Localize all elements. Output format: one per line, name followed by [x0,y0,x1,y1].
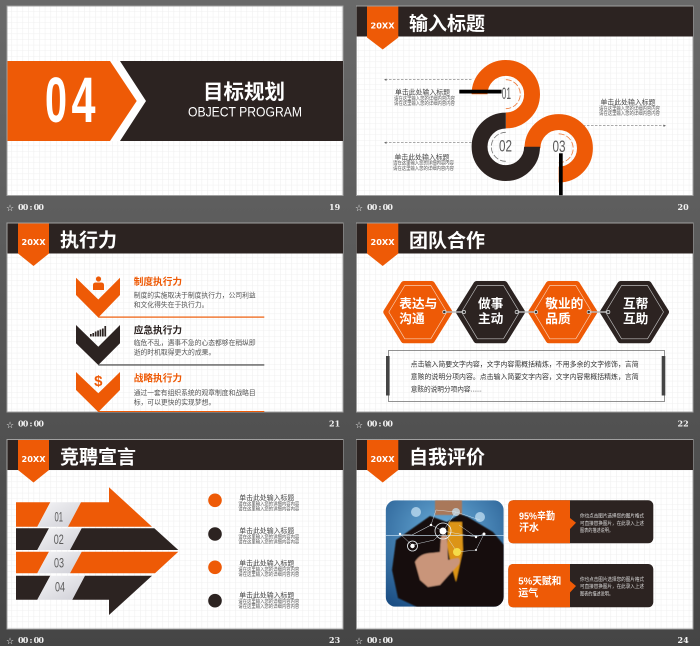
slide 20 year tag: 20XX [370,22,395,30]
hexagon 1 [386,284,449,340]
list text 4: 请在这里输入您的详细内容内容 [238,603,299,610]
slide 21 footer: 21 [329,418,340,428]
list text 4: 请在这里输入您的详细内容内容 [238,598,299,605]
slide 23 footer [6,635,341,646]
item 2 heading: 应急执行力 [134,323,182,336]
slide 22 footer: 22 [678,418,689,428]
slide 20 footer: 20 [678,202,689,212]
card heading: 汗水 [519,521,539,534]
hexagon 1: 表达与 [399,296,437,311]
hexagon 2 [459,284,522,340]
box paragraph: 意赅的说明分项内容...... [411,384,482,394]
hexagon 3 [531,284,594,340]
card heading [518,574,561,600]
list text 3: 请在这里输入您的详细内容内容 [238,571,299,578]
ring 02 dark [480,121,532,173]
hexagon 3: 品质 [545,311,571,326]
item 3 body: 标，可以更快的实现梦想。 [134,398,215,407]
card tab orange [508,564,576,607]
slide 19 footer: 00 : 00 [18,202,44,212]
slide 21 background [7,223,343,412]
slide 22 year tag: 20XX [370,238,395,247]
section number: 0 [45,64,67,136]
card description [580,512,644,534]
slide 20 header bar [356,6,693,36]
card description: 可直接替换图片，在此录入上述 [580,583,644,590]
card description: 图表的描述说明。 [580,590,613,598]
divider orange 1 [98,316,264,318]
callout text right [599,98,660,117]
slide 22 footer [355,418,689,431]
ring 03 orange [532,122,585,175]
hexagon 4: 互助 [623,312,648,326]
card heading: 运气 [518,586,538,600]
panel: slide 23 declaration [6,440,343,646]
ring numbers [499,85,566,156]
slide 23 footer: 23 [329,635,341,645]
slide 20 footer: ☆ [355,204,363,214]
panel: slide 19 section cover [6,6,343,214]
callout text right: 请在这里输入您的详细内容内容 [599,105,660,112]
orange section arrow [8,61,137,141]
card description: 图表的描述说明。 [580,527,613,534]
list text 1 [238,493,299,512]
slide 20 heading: 输入标题 [409,12,485,35]
list text 4 [238,590,299,610]
list text 2: 请在这里输入您的详细内容内容 [238,538,299,546]
slide 24 footer: 24 [678,635,689,645]
card body dark [508,500,653,543]
slide 21 header bar [8,224,343,254]
item 3 body: 通过一套有组织系统的观章制度和战略目 [134,388,256,397]
slide 19 footer: ☆ [6,204,14,214]
slide 24 header bar [356,440,693,470]
list text 1: 请在这里输入您的详细内容内容 [238,506,299,512]
slide 24 heading: 自我评价 [409,446,485,468]
icon: person [93,276,104,290]
list text 3: 单击此处输入标题 [239,558,294,568]
card description [580,576,644,598]
icon: bar chart [90,326,106,336]
arrow band 3 [16,552,178,573]
slide 19 footer [6,202,341,214]
list text 2 [238,526,299,546]
box paragraph: 意赅的说明分项内容。点击输入简要文字内容，文字内容需概括精炼，言简 [411,372,639,381]
slide 23 footer: 00 : 00 [18,635,44,645]
card heading: 95%辛勤 [519,509,555,522]
panel: slide 22 teamwork [355,223,693,431]
callout text lower left: 请在这里输入您的详细内容内容 [393,160,454,166]
slide 24 footer [355,635,689,646]
card description: 可直接替换图片，在此录入上述 [580,520,644,527]
card heading [519,509,555,534]
card 5 percent [508,564,653,607]
slide 21 heading: 执行力 [60,230,117,252]
text box [386,350,665,402]
ring numbers: 03 [552,138,566,156]
dark title banner [120,61,343,141]
list text 2: 单击此处输入标题 [239,526,294,535]
callout text upper left: 请在这里输入您的详细内容内容 [394,100,455,107]
hexagon 2: 主动 [478,311,504,326]
arrow band 4 [16,576,152,615]
arrow band 1: 01 [54,508,63,524]
slide 21 footer: ☆ [6,421,14,431]
arrow band 3: 03 [54,554,64,570]
arrow band 2 [16,528,178,550]
slide 24 year tag: 20XX [370,455,395,464]
chevron orange 3 [76,372,120,412]
slide 19 footer: 19 [329,202,341,212]
callout text lower left [393,152,454,172]
divider orange 3 [98,411,264,412]
slide 20 footer: 00 : 00 [367,202,393,212]
bullet dots [208,494,222,608]
hexagon 4 [603,284,666,340]
list text 4: 单击此处输入标题 [239,590,294,600]
box paragraph [411,360,639,394]
arrow band 4: 04 [55,578,65,594]
chevron orange 1 [76,278,120,318]
hexagon 4: 互帮 [623,296,649,311]
slide 22 footer: ☆ [355,421,363,431]
card heading: 5%天赋和 [518,574,561,588]
slide 24 background [356,440,693,629]
divider dark 2 [98,364,264,366]
panel: slide 24 self assessment [355,440,693,646]
item 3 body [134,388,256,407]
item 3 heading: 战略执行力 [134,372,182,385]
item 1 [76,275,264,412]
slide 21 footer: 00 : 00 [18,418,44,428]
slide 22 footer: 00 : 00 [367,418,393,428]
white chevron band [103,61,146,141]
slide 22 background [356,223,693,412]
callout text right: 请在这里输入您的详细内容内容 [599,110,660,117]
black bars [459,90,563,195]
inner dashed circles [491,80,573,163]
dashed leader lines [385,80,664,143]
slide 21 footer [6,418,340,431]
item 1 heading: 制度执行力 [134,275,182,288]
photo: businessman touching network [386,500,504,607]
icon: dollar: $ [94,373,103,390]
list text 1: 请在这里输入您的详细内容内容 [238,500,299,508]
slide 22 year tag [367,224,398,266]
slide 23 header bar [8,440,343,470]
callout text lower left: 单击此处输入标题 [394,152,450,162]
ring 01 orange [480,68,532,120]
slide 23 year tag [18,440,49,482]
callout text upper left [394,88,455,107]
box paragraph: 点击输入简要文字内容，文字内容需概括精炼，不用多余的文字修饰，言简 [411,360,639,368]
ring numbers: 01 [502,85,511,103]
slide 22 header bar [356,224,693,254]
item 2 body [134,339,256,356]
list text 1: 单击此处输入标题 [239,493,294,502]
slide 20 background [356,6,693,196]
card body dark [508,564,653,607]
list text 3: 请在这里输入您的详细内容内容 [238,566,299,573]
card 95 percent [508,500,653,543]
card tab orange [508,500,576,543]
slide 23 year tag: 20XX [22,455,46,464]
slide 22 heading: 团队合作 [409,230,485,252]
hexagon 2: 做事 [478,296,504,311]
box side bars [386,356,665,396]
box outline [388,350,664,402]
item 2 body: 临危不乱，遇事不急的心态都够在稍纵即 [134,338,256,347]
callout text lower left: 请在这里输入您的详细内容内容 [393,165,454,172]
ring numbers: 02 [499,138,512,156]
hexagon 1: 沟通 [399,311,425,326]
arrow band 2: 02 [54,531,64,547]
item 1 body: 和文化得失在于执行力。 [134,300,208,309]
chevron dark 2 [76,325,120,365]
arrow band 1 [16,487,152,527]
slide 24 footer: 00 : 00 [367,635,393,645]
slide 21 year tag: 20XX [22,238,46,247]
item 2 body: 逝的时机取得更大的成果。 [134,347,215,356]
slide 23 heading: 竞聘宣言 [60,446,136,468]
leader arrowheads [384,78,666,144]
callout text right: 单击此处输入标题 [600,98,656,106]
slide 23 background [7,440,343,629]
hexagon 3: 敬业的 [545,296,583,311]
slide 20 footer [355,202,689,214]
callout text upper left: 请在这里输入您的详细内容内容 [394,95,455,102]
slide 20 year tag [367,6,398,50]
hexagon connectors [443,310,610,314]
card description: 你也点击图片选择您的图片格式 [580,576,644,583]
list text 2: 请在这里输入您的详细内容内容 [238,534,299,540]
slide 21 year tag [18,224,49,266]
item 1 body: 制度的实施取决于制度执行力，公司利益 [134,290,256,299]
card description: 你也点击图片选择您的图片格式 [580,512,644,520]
section number: 4 [72,64,96,136]
section subtitle: OBJECT PROGRAM [188,104,302,120]
list text 3 [238,558,299,578]
slide 24 year tag [367,440,398,482]
item 1 body [134,290,256,309]
slide 19 background [7,6,343,196]
section title: 目标规划 [203,81,285,104]
panel: slide 21 execution [6,223,343,431]
panel: slide 20 s-curve [355,6,693,214]
callout text upper left: 单击此处输入标题 [395,88,450,96]
